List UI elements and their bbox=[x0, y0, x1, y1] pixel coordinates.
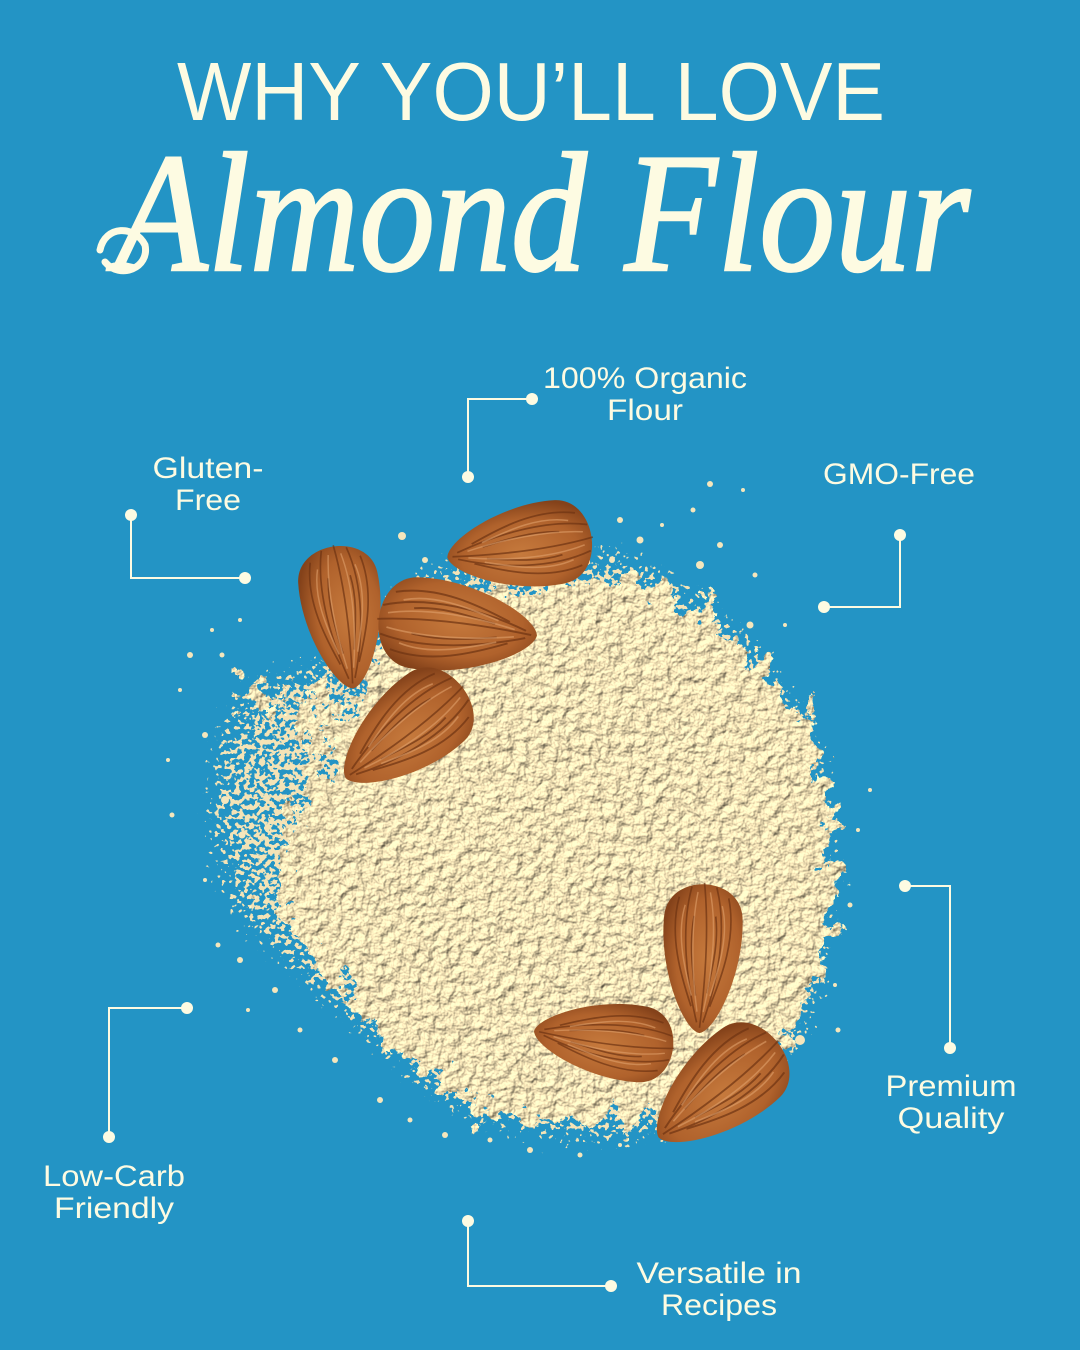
loose flour specks bbox=[166, 481, 872, 1158]
almonds bottom group bbox=[529, 882, 807, 1173]
label: Low-Carb Friendly: Friendly bbox=[54, 1192, 174, 1225]
label: Versatile in Recipes: Recipes bbox=[661, 1289, 777, 1322]
almond 3 bbox=[373, 573, 542, 681]
label: 100% Organic Flour: 100% Organic bbox=[543, 362, 747, 395]
label: Gluten-Free: Gluten- bbox=[152, 452, 264, 485]
almonds top group bbox=[293, 495, 599, 813]
label: Gluten-Free bbox=[152, 452, 264, 517]
label: GMO-Free: GMO-Free bbox=[823, 458, 975, 491]
flour mound bbox=[270, 580, 835, 1125]
label: Gluten-Free: Free bbox=[175, 484, 241, 517]
label: Premium Quality: Premium bbox=[886, 1070, 1016, 1103]
label: Low-Carb Friendly bbox=[43, 1160, 185, 1225]
almond 1 bbox=[293, 540, 393, 694]
connector: 100% Organic Flour bbox=[462, 393, 538, 483]
connector: Premium Quality bbox=[899, 880, 956, 1054]
label: 100% Organic Flour bbox=[543, 362, 747, 427]
almond 5 bbox=[660, 882, 744, 1034]
connector: GMO-Free bbox=[818, 529, 906, 613]
label: 100% Organic Flour: Flour bbox=[607, 394, 683, 427]
almond 7 bbox=[630, 1006, 807, 1173]
flour clump upper left bbox=[285, 680, 340, 750]
label: Premium Quality bbox=[886, 1070, 1016, 1135]
connector: Low-Carb Friendly bbox=[103, 1002, 193, 1143]
almond 6 bbox=[529, 993, 679, 1087]
flour scatter bbox=[185, 530, 855, 1165]
almond 2 bbox=[441, 495, 599, 599]
label: Premium Quality: Quality bbox=[898, 1102, 1004, 1135]
connector: Gluten-Free bbox=[125, 509, 251, 584]
connector: Versatile in Recipes bbox=[462, 1215, 617, 1292]
label: Versatile in Recipes bbox=[636, 1257, 802, 1322]
label: Low-Carb Friendly: Low-Carb bbox=[43, 1160, 185, 1193]
flour clump left bbox=[238, 668, 280, 716]
flourish: title swash bbox=[100, 231, 146, 271]
almond 4 bbox=[318, 651, 490, 813]
label: Versatile in Recipes: Versatile in bbox=[636, 1257, 802, 1290]
heading: why you'll love: WHY YOU’LL LOVE bbox=[177, 45, 885, 138]
flour pile illustration bbox=[166, 481, 872, 1165]
script heading: Almond Flour: Almond Flour bbox=[106, 119, 971, 307]
